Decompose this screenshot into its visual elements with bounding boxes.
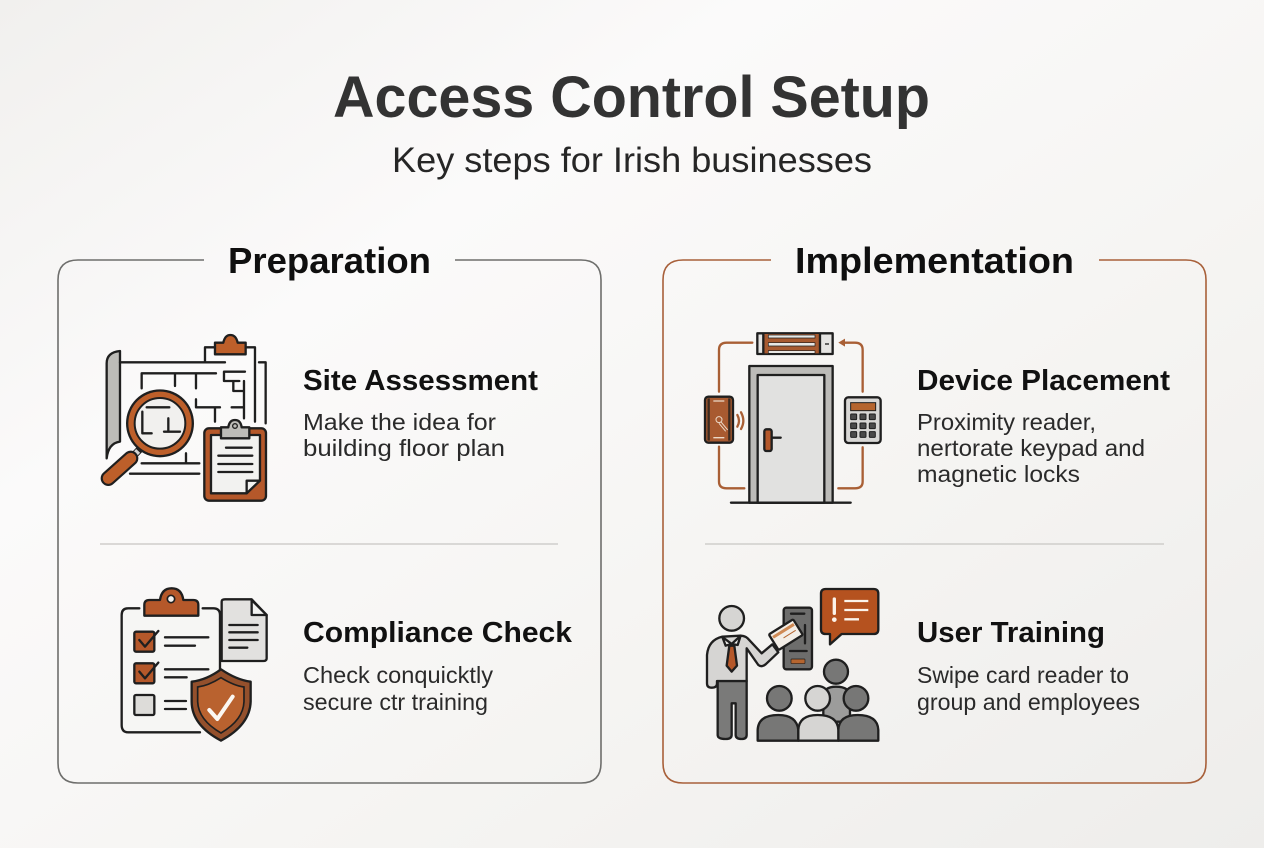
panel: preparation [58, 240, 601, 783]
item text: site assessment: Make the idea for [303, 409, 496, 435]
heading: implementation: Implementation [795, 240, 1074, 281]
icon: compliance checklist with shield [122, 588, 267, 741]
item text line 2: user training: group and employees [917, 689, 1140, 715]
icon: floor plan with magnifier and clipboard [107, 335, 266, 501]
item title: device placement: Device Placement [917, 365, 1170, 397]
item title: compliance check: Compliance Check [303, 617, 573, 649]
item text: compliance check: Check conquicktly [303, 662, 494, 688]
panel outline: implementation [663, 260, 1206, 783]
title: Access Control Setup [333, 65, 930, 130]
item text line 2: site assessment: building floor plan [303, 435, 505, 461]
icon: door with reader, keypad and magnetic lock [705, 333, 881, 503]
panel outline: preparation [58, 260, 601, 783]
subtitle: Key steps for Irish businesses [392, 141, 872, 180]
item text: device placement: Proximity reader, [917, 409, 1096, 435]
item text line 2: device placement: nertorate keypad and [917, 435, 1145, 461]
item title: site assessment: Site Assessment [303, 365, 538, 397]
item text line 2: compliance check: secure ctr training [303, 689, 488, 715]
item title: user training: User Training [917, 617, 1105, 649]
item text: user training: Swipe card reader to [917, 662, 1129, 688]
panel: implementation [663, 240, 1206, 783]
icon: trainer with card reader and group [707, 589, 878, 741]
item text line 3: device placement: magnetic locks [917, 461, 1080, 487]
heading: preparation: Preparation [228, 240, 431, 281]
